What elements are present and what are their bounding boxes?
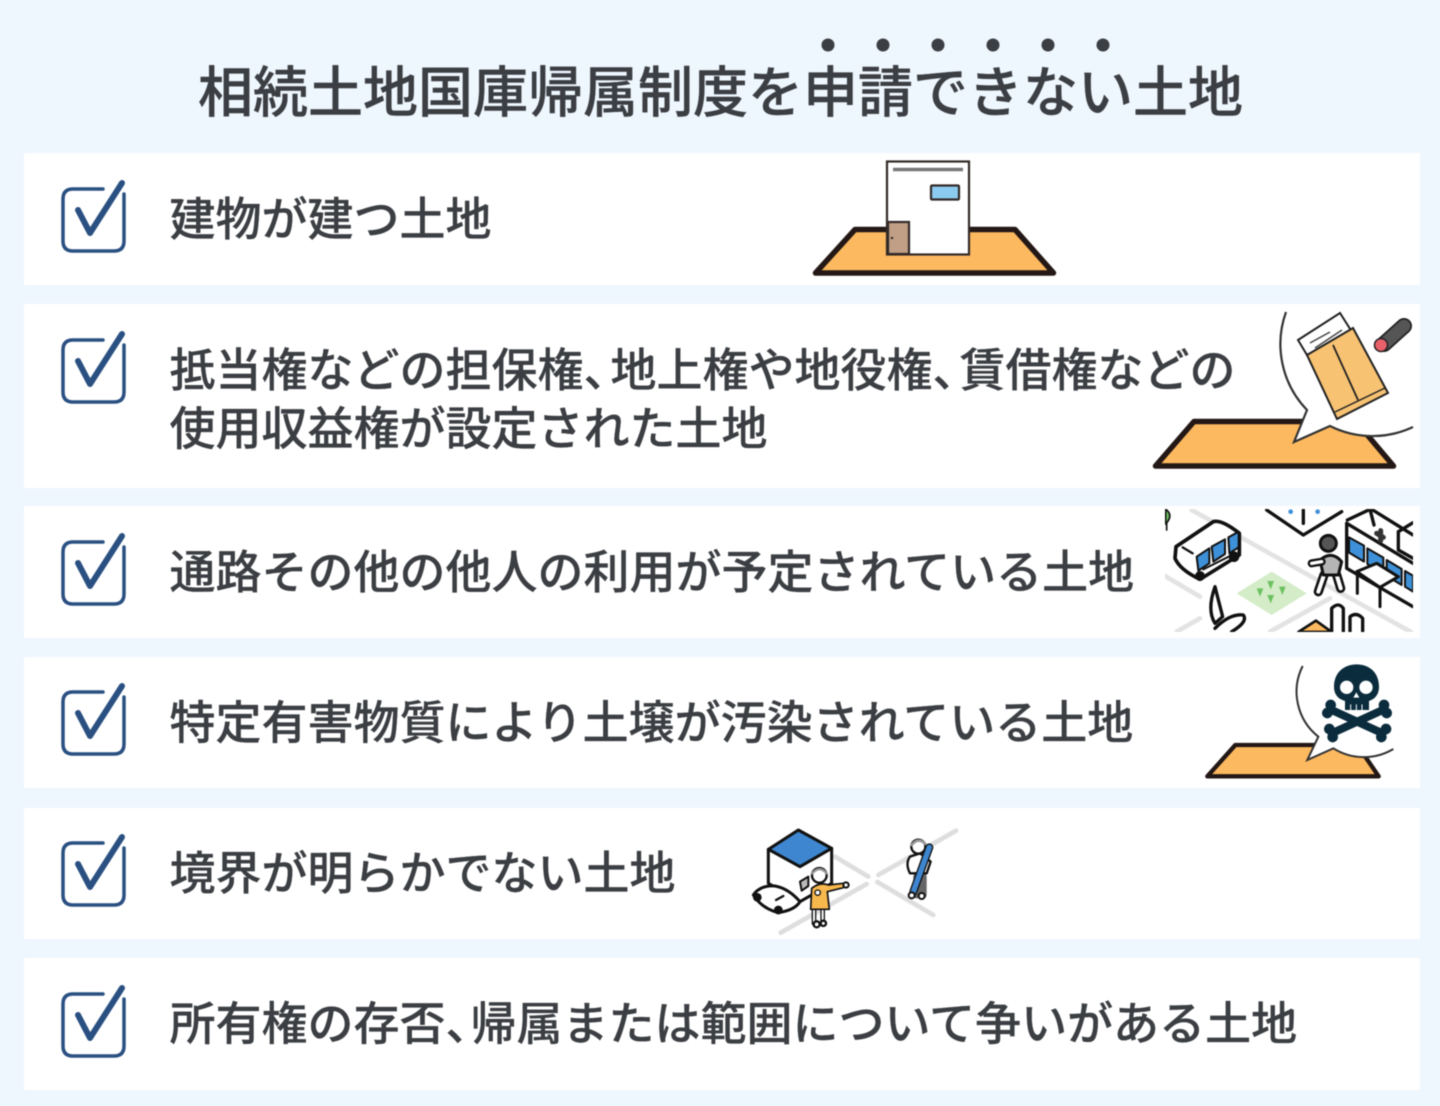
panel: disputed land xyxy=(24,958,1420,1090)
icon: isometric town xyxy=(1164,508,1414,633)
icon: checkbox xyxy=(63,988,124,1056)
icon: checkbox xyxy=(63,334,124,402)
icon: checkbox xyxy=(63,686,124,754)
icon: land with skull speech bubble xyxy=(1207,664,1393,776)
text: disputed land: 帰属または範囲について争いがある土地 xyxy=(470,998,1297,1050)
text: rights-encumbered land: 使用収益権が設定された土地 xyxy=(170,403,768,455)
text: planned use: 通路その他の他人の利用が予定されている土地 xyxy=(170,546,1134,598)
panel: land planned for others' use xyxy=(24,506,1420,638)
text: unclear boundary: 境界が明らかでない土地 xyxy=(170,848,676,900)
text: building land: 建物が建つ土地 xyxy=(170,194,492,246)
icon: checkbox xyxy=(63,183,124,251)
icon: building on land xyxy=(816,162,1054,273)
icon: surveyors at boundary xyxy=(753,830,956,933)
icon: checkbox xyxy=(63,536,124,604)
panel: building land xyxy=(24,153,1420,285)
panel: unclear boundary xyxy=(24,808,1420,939)
title: 相続土地国庫帰属制度を申請できない土地 xyxy=(198,62,1243,124)
panel: contaminated land xyxy=(24,657,1420,788)
text: rights-encumbered land: 抵当権などの担保権、 xyxy=(170,344,630,396)
text: disputed land: 所有権の存否、 xyxy=(170,998,492,1050)
icon: checkbox xyxy=(63,837,124,905)
text: rights-encumbered land: 地上権や地役権、賃借権などの xyxy=(610,344,1236,396)
icon: land with envelope speech bubble xyxy=(1156,312,1413,466)
text: contaminated land: 特定有害物質により土壌が汚染されている土地 xyxy=(170,697,1133,749)
panel: rights-encumbered land xyxy=(24,304,1420,488)
